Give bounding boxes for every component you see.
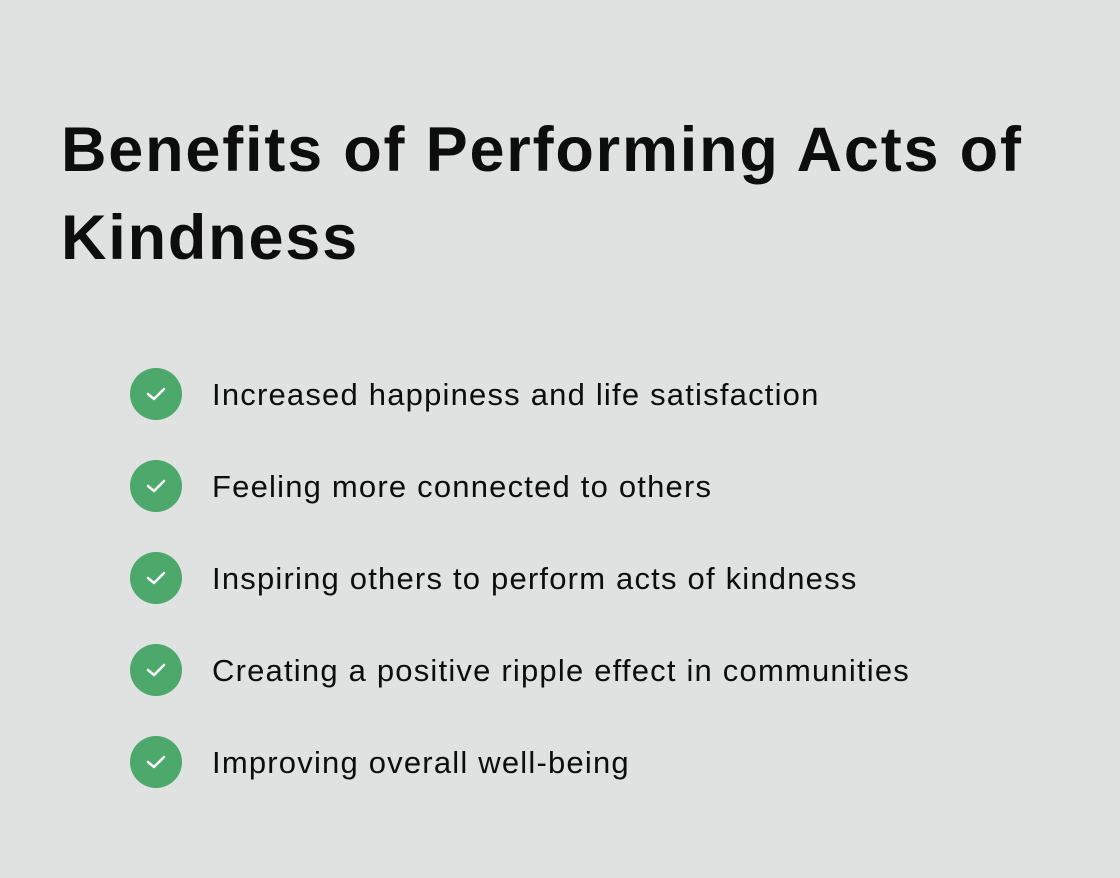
item 5 [130,736,630,788]
item 5: Improving overall well-being [212,745,630,780]
title: Benefits of Performing Acts of Kindness [61,115,1023,273]
item 1 [130,368,820,420]
item 1: Increased happiness and life satisfaction [212,377,820,412]
item 3: Inspiring others to perform acts of kindness [212,561,858,596]
item 4 [130,644,910,696]
item 4: Creating a positive ripple effect in communities [212,653,910,688]
item 2 [130,460,712,512]
item 2: Feeling more connected to others [212,469,712,504]
list: benefits [130,368,910,788]
item 3 [130,552,858,604]
